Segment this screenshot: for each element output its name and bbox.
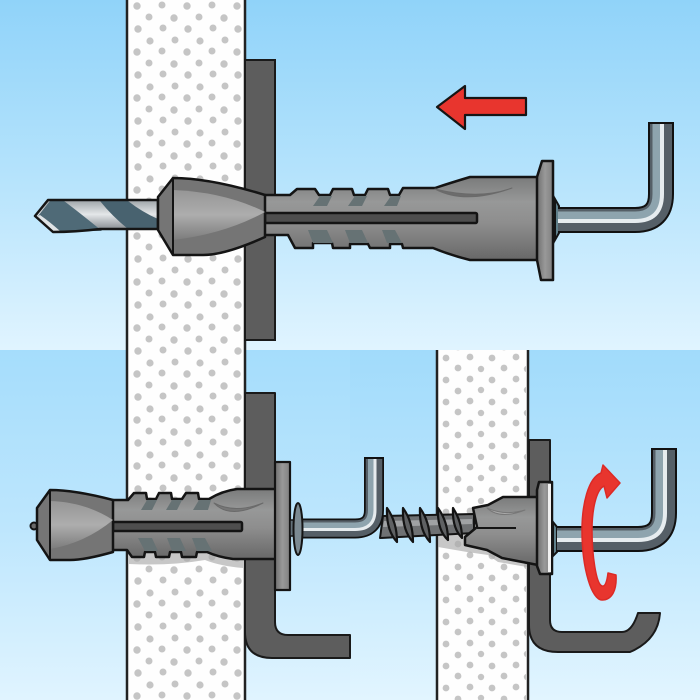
plug head bbox=[158, 178, 265, 255]
plug body bbox=[110, 489, 276, 559]
step 2 hook bbox=[290, 457, 375, 555]
slot bbox=[113, 522, 242, 531]
hook bbox=[555, 122, 662, 240]
step 2 bracket bbox=[245, 393, 350, 658]
bracket bbox=[245, 60, 275, 340]
plug body bbox=[262, 177, 540, 260]
arrow: rotate bbox=[582, 465, 620, 600]
bracket bbox=[529, 440, 660, 652]
plug tip bbox=[30, 522, 38, 530]
step 2 plug bbox=[30, 489, 276, 560]
wall bbox=[437, 350, 528, 700]
panel: step 2 plug inserted bbox=[0, 350, 350, 700]
panel: step 3 hook screwed in bbox=[350, 350, 700, 700]
expanded plug bbox=[465, 497, 538, 565]
plug flange bbox=[537, 161, 553, 280]
panel: step 1 drilling bbox=[0, 0, 700, 350]
step 2 plug flange bbox=[275, 462, 290, 590]
drill bit bbox=[35, 200, 158, 232]
hook bbox=[553, 448, 665, 556]
slot bbox=[265, 213, 477, 223]
plug shadow on wall bbox=[129, 550, 243, 568]
panel background bbox=[0, 0, 700, 350]
plug flange bbox=[537, 482, 552, 574]
plug shadow on wall bbox=[438, 530, 527, 567]
washer bbox=[294, 503, 302, 555]
screw bbox=[380, 508, 474, 542]
arrow: push left bbox=[437, 86, 526, 129]
wall bbox=[127, 0, 245, 350]
panel background bbox=[350, 350, 700, 700]
plug head bbox=[37, 490, 113, 560]
panel background bbox=[0, 350, 350, 700]
wall bbox=[127, 350, 245, 700]
